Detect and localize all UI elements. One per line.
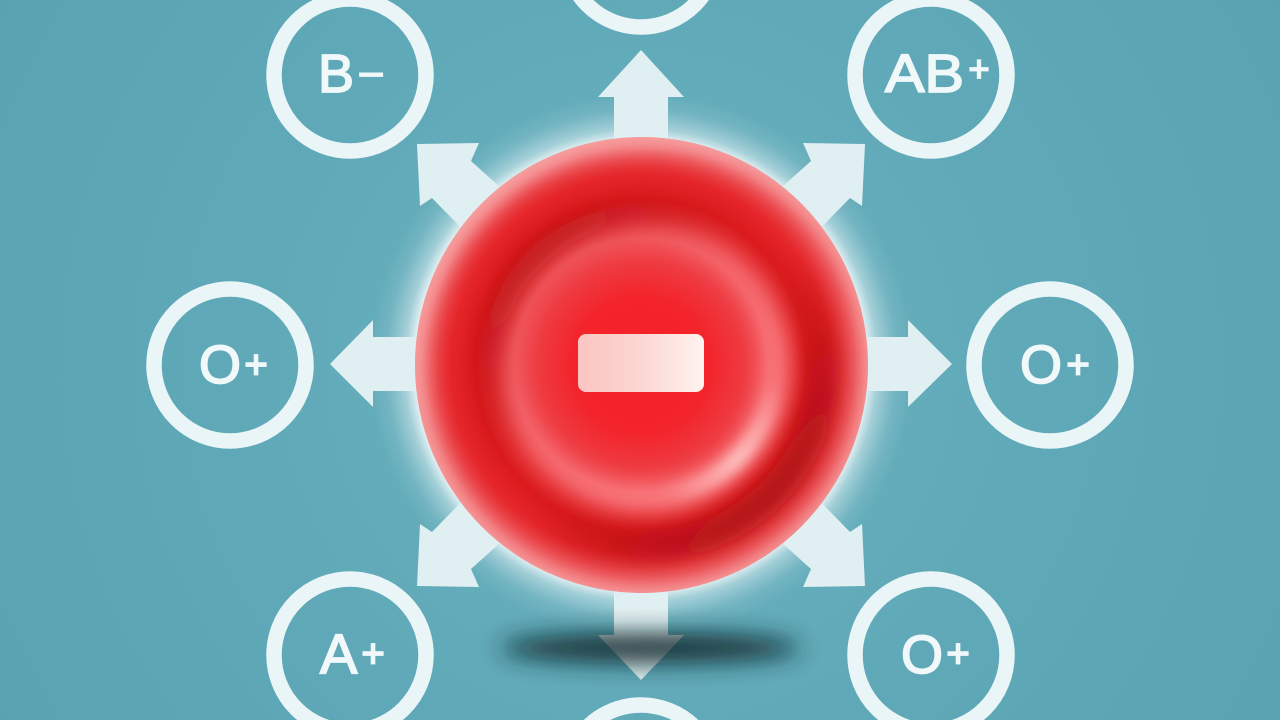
minus sign — [578, 334, 704, 392]
badge: O+ left: + — [244, 343, 268, 387]
rim highlight — [418, 141, 866, 589]
red blood cell — [415, 137, 868, 593]
arrow: lower right — [762, 485, 865, 587]
arrows — [330, 50, 952, 680]
badge: A+: A — [320, 622, 358, 685]
arrow: left — [330, 320, 425, 407]
badge: O+ right: O — [1020, 335, 1062, 395]
badge: AB+: AB — [885, 44, 964, 104]
arrow: right — [860, 320, 952, 407]
badge: O+ right: + — [1066, 343, 1090, 387]
badge: AB+ — [855, 0, 1007, 151]
cell shadow — [500, 633, 800, 663]
ring: bottom — [565, 705, 717, 720]
badge: A+: + — [361, 632, 385, 676]
blood type rings — [565, 0, 717, 720]
arrow: upper left — [417, 143, 520, 245]
badge: O+ lower right: + — [946, 632, 970, 676]
badge: B-: B — [318, 44, 354, 104]
badge: B-: – — [360, 50, 383, 94]
cell glow — [369, 93, 913, 637]
infographic: blood cell donor diagram — [146, 0, 1134, 720]
badge: O+ lower right — [855, 579, 1007, 720]
ring: top — [565, 0, 717, 27]
badge: O+ lower right: O — [901, 625, 943, 685]
arrow: lower left — [417, 485, 520, 587]
badge: A+ — [274, 579, 426, 720]
badge: O+ left — [154, 289, 306, 441]
arrow: upper right — [762, 143, 865, 245]
badge: O+ right — [974, 289, 1126, 441]
pink inner ring highlight — [509, 231, 777, 499]
badge: B- — [274, 0, 426, 151]
dark crescents — [561, 284, 846, 570]
arrow: down — [598, 585, 684, 680]
badge: AB+: + — [968, 48, 990, 89]
arrow: up — [598, 50, 684, 145]
badge: O+ left: O — [199, 335, 241, 395]
